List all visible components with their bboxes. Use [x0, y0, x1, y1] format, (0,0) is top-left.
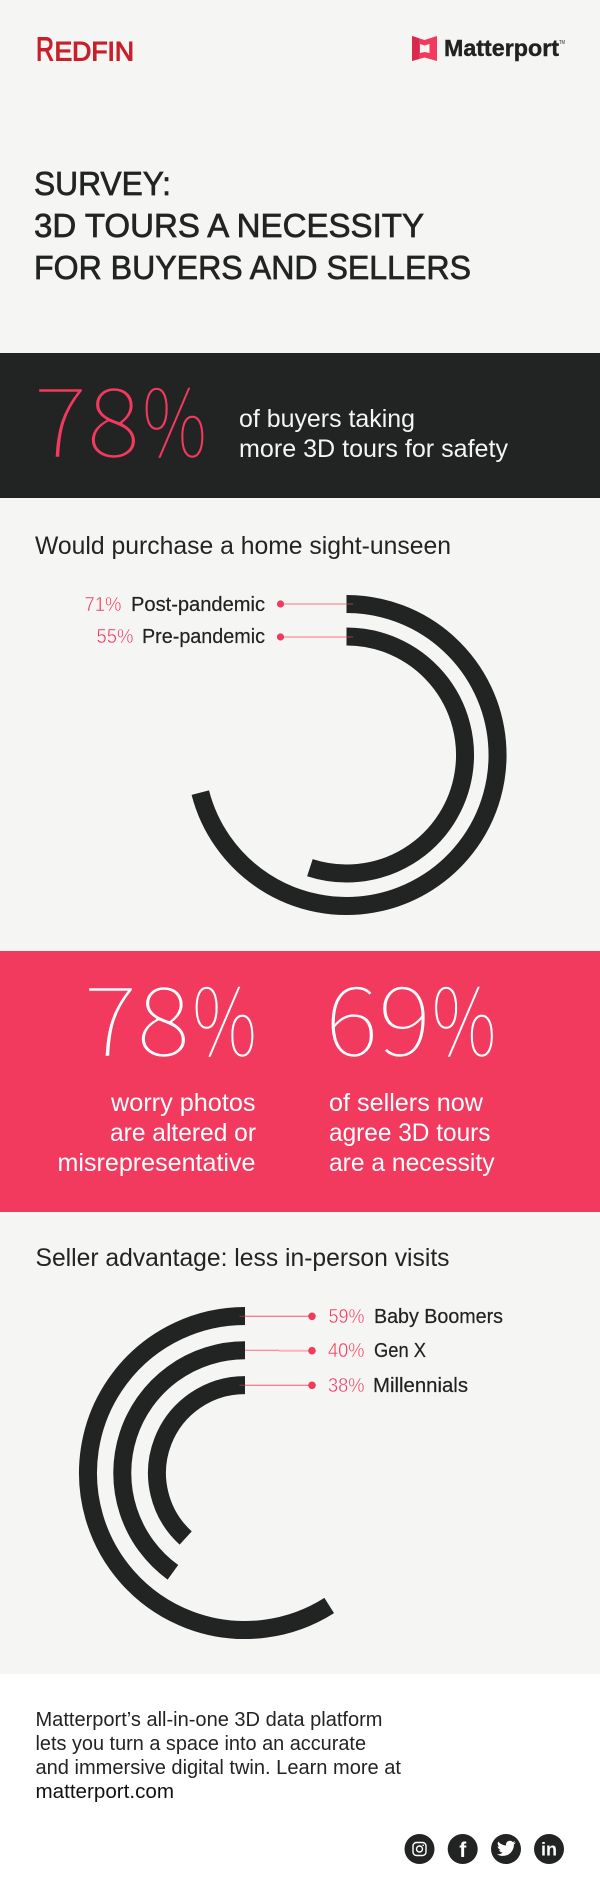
arc: gen x 40% [122, 1350, 245, 1572]
footer text: matterport.com [36, 1781, 174, 1803]
big stat 78%: % [192, 948, 257, 1084]
big stat 69%: % [432, 948, 496, 1084]
trademark: TM [559, 40, 565, 46]
heading: seller advantage: Seller advantage: less in-person visits [36, 1244, 450, 1272]
footer text: and immersive digital twin. Learn more at [36, 1757, 401, 1779]
icon: instagram [404, 1834, 434, 1864]
radial chart: in-person visits [88, 1306, 503, 1630]
label: 59% baby boomers: 59% [328, 1306, 365, 1328]
title: 3D TOURS A NECESSITY [34, 207, 424, 244]
heading: would purchase: Would purchase a home sight-unseen [35, 532, 451, 560]
title [34, 165, 471, 286]
stat description: more 3D tours for safety [239, 435, 508, 463]
icon: linkedin: in [541, 1840, 557, 1860]
label: 38% millennials: 38% [328, 1375, 365, 1397]
title: FOR BUYERS AND SELLERS [34, 249, 471, 286]
leader: millennials [240, 1382, 316, 1389]
text: sellers agree: agree 3D tours [329, 1119, 490, 1147]
logo: Matterport [412, 35, 565, 61]
arc: post-pandemic 71% [200, 604, 498, 906]
label: 40% gen x [328, 1340, 426, 1362]
text: sellers agree: of sellers now [329, 1089, 484, 1117]
icon: Matterport folded square [412, 36, 437, 61]
text: worry photos: are altered or [110, 1119, 256, 1147]
footer text: Matterport’s all-in-one 3D data platform [36, 1709, 382, 1731]
panel: photos and sellers stats [0, 948, 600, 1212]
footer background [0, 1674, 600, 1900]
panel background [0, 353, 600, 498]
big stat 78%: 78 [34, 349, 140, 485]
icon: facebook [448, 1834, 478, 1864]
title: SURVEY: [34, 165, 171, 202]
icon: twitter [491, 1834, 521, 1864]
header with logos [36, 30, 565, 68]
arc: millennials 38% [157, 1385, 245, 1538]
leader: post-pandemic [277, 600, 353, 608]
wordmark: Matterport [444, 35, 559, 61]
text: sellers agree: are a necessity [329, 1149, 495, 1177]
stat description: of buyers taking [239, 405, 415, 433]
arc: pre-pandemic 55% [310, 636, 465, 874]
leader: baby boomers [240, 1312, 316, 1320]
label: 40% gen x: Gen X [374, 1340, 426, 1362]
text: worry photos [58, 1089, 256, 1177]
label: 55% pre-pandemic: 55% [96, 626, 134, 648]
label: 71% post-pandemic: 71% [84, 594, 122, 616]
panel: 78% of buyers [0, 349, 600, 498]
logo: Redfin: R [36, 30, 54, 68]
icon: linkedin [534, 1834, 564, 1864]
text: worry photos: misrepresentative [58, 1149, 256, 1177]
label: 38% millennials: Millennials [373, 1375, 468, 1397]
leader: pre-pandemic [277, 633, 353, 641]
icon: facebook: f [459, 1839, 467, 1862]
big stat 78%: % [142, 349, 207, 485]
label: 40% gen x: 40% [328, 1340, 365, 1362]
label: 55% pre-pandemic: Pre-pandemic [142, 626, 265, 648]
footer text: lets you turn a space into an accurate [36, 1733, 366, 1755]
text: sellers agree [329, 1089, 495, 1177]
logo: Redfin [36, 30, 134, 68]
panel background [0, 951, 600, 1212]
logo: Redfin: EDFIN [54, 36, 134, 66]
panel: footer [0, 1674, 600, 1900]
big stat 78%: 78 [84, 948, 190, 1084]
big stat 69%: 69 [325, 948, 431, 1084]
leader: gen x [245, 1347, 316, 1354]
label: 38% millennials [328, 1375, 468, 1397]
radial chart: sight-unseen [84, 594, 498, 906]
label: 71% post-pandemic: Post-pandemic [131, 594, 265, 616]
stat description [239, 405, 508, 463]
arc: baby boomers 59% [88, 1316, 329, 1630]
text: worry photos: worry photos [110, 1089, 256, 1117]
label: 59% baby boomers: Baby Boomers [374, 1306, 503, 1328]
footer text [36, 1709, 401, 1803]
